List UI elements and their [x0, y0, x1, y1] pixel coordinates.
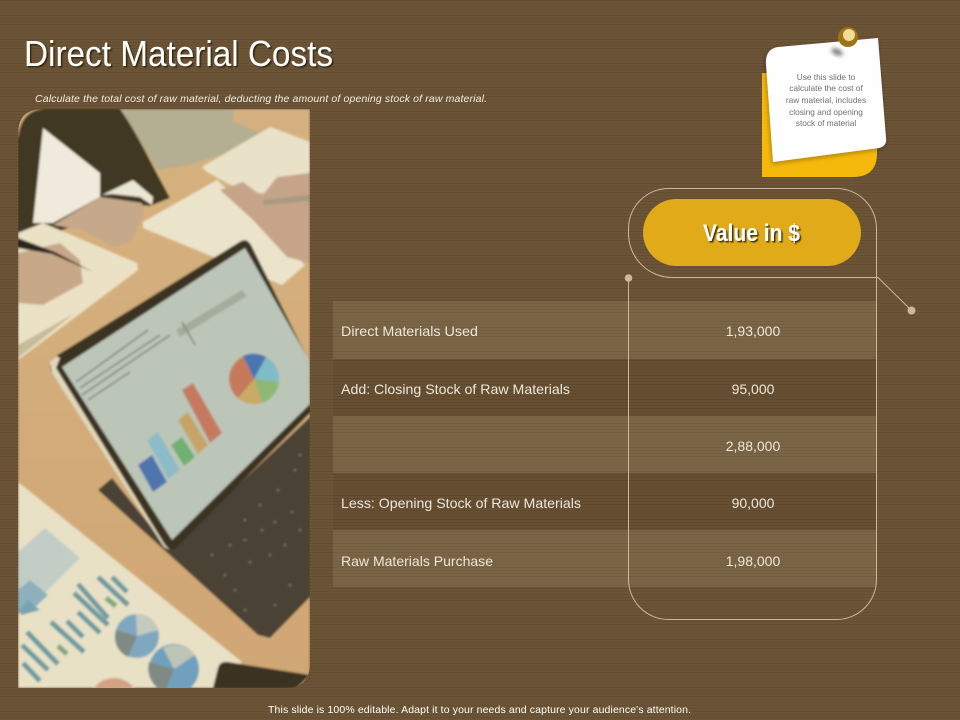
value values — [726, 323, 780, 569]
tablet — [50, 240, 310, 550]
note text: Use this slide to — [797, 72, 856, 82]
row labels — [341, 323, 581, 569]
right hand — [220, 173, 310, 263]
bottom paper — [18, 482, 242, 688]
value values: 1,98,000 — [726, 553, 780, 569]
phone — [213, 662, 310, 688]
footer: This slide is 100% editable. Adapt it to your needs and capture your audience's attention. — [268, 704, 691, 716]
value values: 95,000 — [732, 381, 775, 397]
row labels: Add: Closing Stock of Raw Materials — [341, 381, 570, 397]
table rows — [333, 301, 876, 587]
row labels: Less: Opening Stock of Raw Materials — [341, 495, 581, 511]
note text: calculate the cost of — [789, 83, 863, 93]
note text: closing and opening — [789, 107, 863, 117]
pin — [830, 27, 858, 57]
centre paper — [143, 180, 305, 285]
tablet bars — [138, 455, 167, 492]
small paper pies — [115, 614, 159, 658]
row labels: Raw Materials Purchase — [341, 553, 493, 569]
left notebook — [18, 223, 138, 360]
value values: 2,88,000 — [726, 438, 780, 454]
note text: raw material, includes — [786, 95, 866, 105]
keyboard — [98, 417, 310, 638]
value header pill: Value in $ — [703, 220, 801, 247]
column outline with connector — [625, 188, 916, 620]
title: Direct Material Costs — [24, 33, 333, 74]
photo: tablet on a meeting desk — [18, 109, 310, 720]
suit — [18, 109, 170, 240]
top right paper — [202, 127, 310, 200]
subtitle: Calculate the total cost of raw material, deducting the amount of opening stock of raw material. — [35, 93, 487, 105]
value header pill — [643, 199, 861, 266]
row labels: Direct Materials Used — [341, 323, 478, 339]
sticky note — [762, 27, 886, 177]
note text: stock of material — [796, 118, 856, 128]
value values: 1,93,000 — [726, 323, 780, 339]
tablet pie — [228, 356, 256, 399]
note text — [786, 72, 866, 128]
value values: 90,000 — [732, 495, 775, 511]
